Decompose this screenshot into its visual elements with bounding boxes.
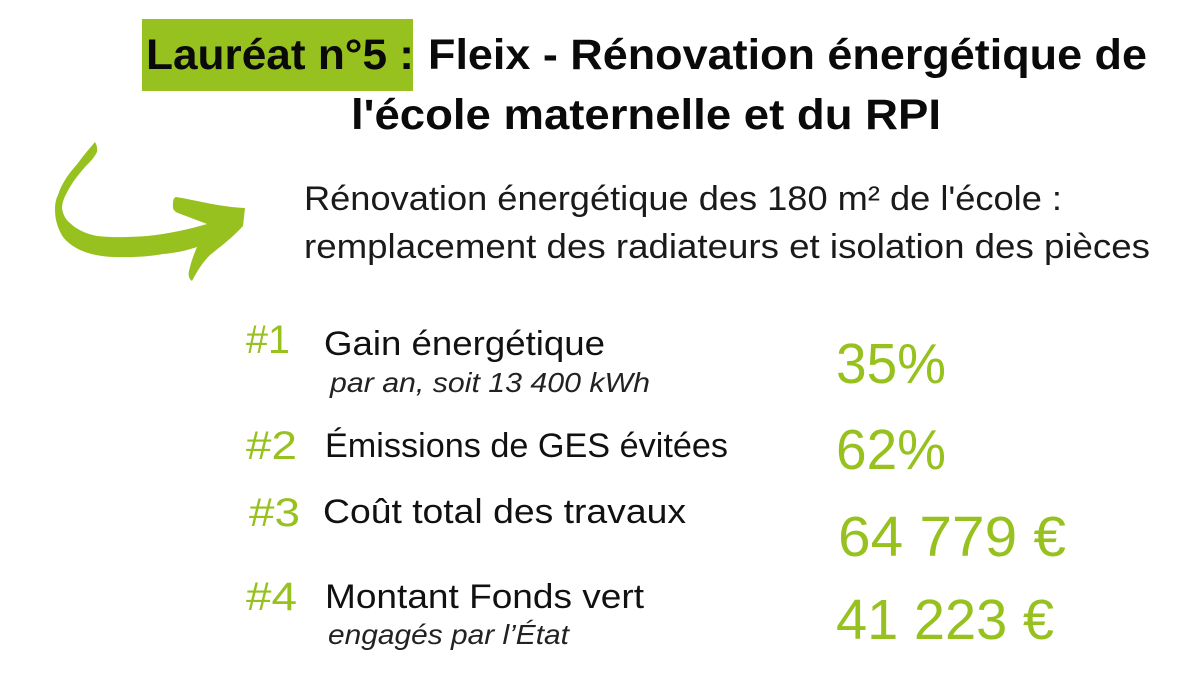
title bbox=[146, 31, 1147, 139]
title highlight bbox=[142, 19, 413, 91]
label: Montant Fonds vert bbox=[325, 578, 645, 616]
title: Lauréat n°5 : bbox=[146, 31, 414, 79]
rank 4: #4 bbox=[246, 575, 297, 619]
label: Coût total des travaux bbox=[323, 493, 686, 531]
sublabel: engagés par l’État bbox=[328, 619, 570, 650]
icon: curved green arrow bbox=[55, 142, 245, 281]
value: 35% bbox=[836, 332, 946, 396]
value: 64 779 € bbox=[838, 505, 1066, 569]
row 2: GHG emissions avoided bbox=[246, 418, 946, 482]
value: 41 223 € bbox=[836, 588, 1054, 652]
row 3: total cost bbox=[249, 491, 1066, 569]
description bbox=[304, 180, 1150, 266]
rank 2: #2 bbox=[246, 424, 297, 468]
title: Fleix - Rénovation énergétique de bbox=[428, 31, 1147, 79]
row 1: energy gain bbox=[246, 318, 946, 398]
rank 3: #3 bbox=[249, 491, 300, 535]
label: Gain énergétique bbox=[324, 325, 605, 363]
title: l'école maternelle et du RPI bbox=[351, 91, 941, 139]
rank 1: #1 bbox=[246, 318, 290, 362]
row 4: Fonds vert amount bbox=[246, 575, 1054, 652]
label: Émissions de GES évitées bbox=[325, 427, 728, 465]
value: 62% bbox=[836, 418, 946, 482]
description: Rénovation énergétique des 180 m² de l'école : bbox=[304, 180, 1062, 218]
sublabel: par an, soit 13 400 kWh bbox=[329, 367, 650, 398]
description: remplacement des radiateurs et isolation des pièces bbox=[304, 228, 1150, 266]
